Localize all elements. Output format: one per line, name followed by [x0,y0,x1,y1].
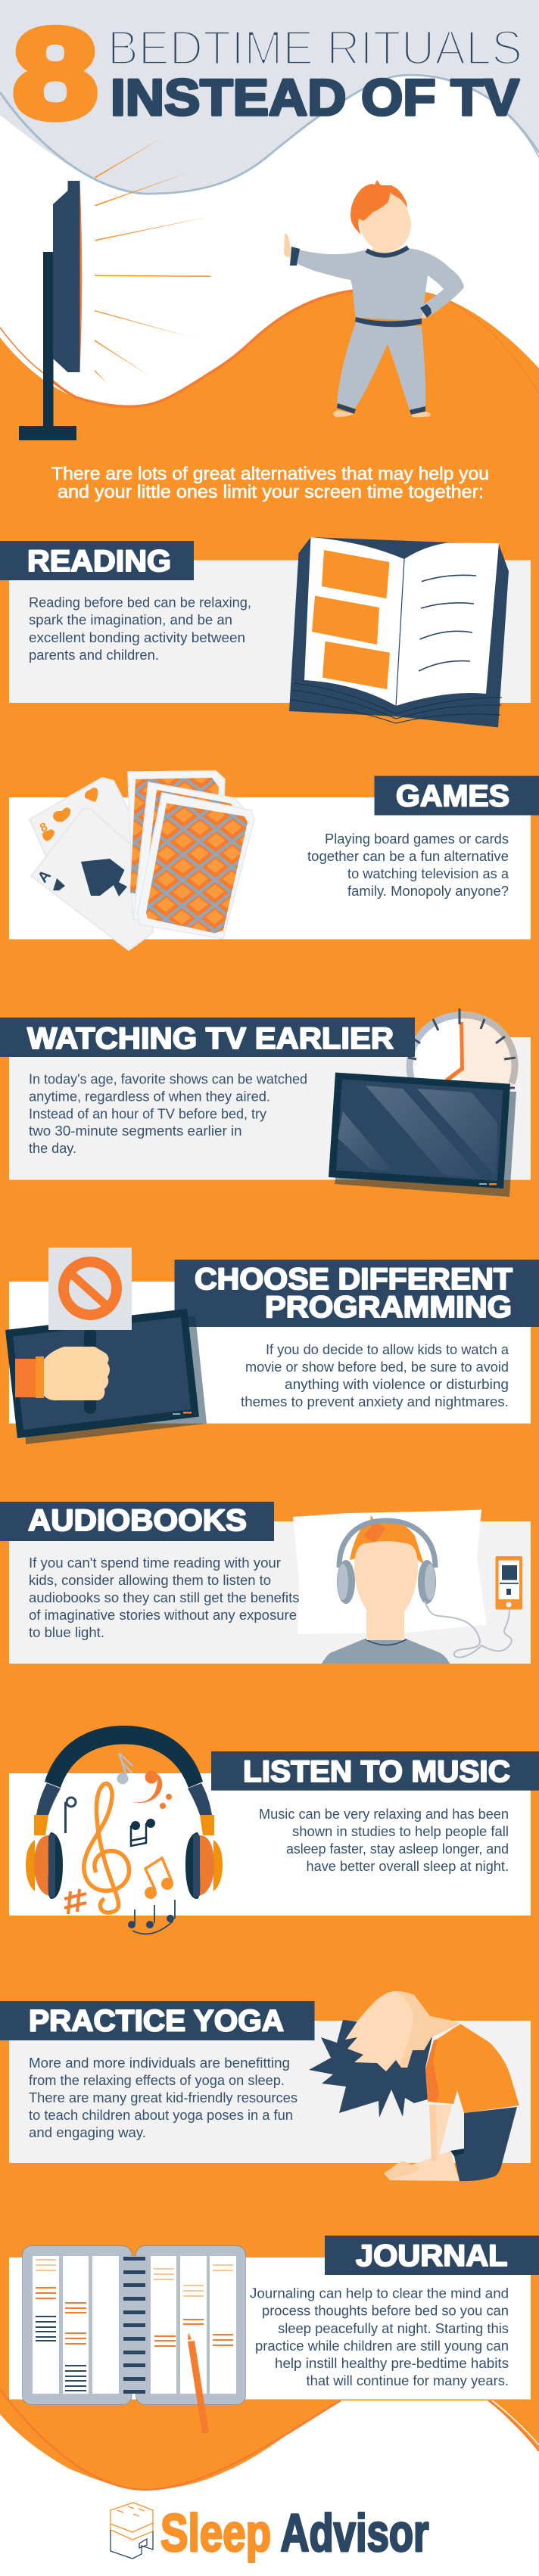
wordmark: Sleep [160,2503,271,2562]
icon: flat screen tv [329,1073,516,1197]
icon: headphones with music notes [26,1726,223,1934]
text: journal [250,2286,509,2388]
heading: watching tv earlier: WATCHING TV EARLIER [27,1022,394,1055]
panel: games [9,771,539,950]
text: practice yoga: from the relaxing effects of yoga on sleep. [29,2073,285,2088]
text: practice yoga: and engaging way. [29,2125,146,2140]
heading: games: GAMES [396,779,509,813]
title line one: BEDTIME RITUALS [107,20,522,75]
title line two: INSTEAD OF TV [111,69,519,126]
heading: listen to music: LISTEN TO MUSIC [243,1755,510,1788]
panel: listen to music [9,1726,539,1934]
text: watching tv earlier [29,1072,307,1156]
text: journal: that will continue for many years. [306,2373,509,2388]
panel: practice yoga [0,1991,531,2181]
text: watching tv earlier: the day. [29,1141,76,1156]
text: reading: Reading before bed can be relaxing, [29,595,251,610]
text: games: together can be a fun alternative [307,849,509,864]
wordmark: Advisor [280,2503,428,2562]
text: choose different programming: themes to prevent anxiety and nightmares. [241,1394,509,1409]
icon: playing cards: A [35,867,55,886]
text: listen to music: Music can be very relaxing and has been [259,1807,509,1822]
heading: choose different programming: CHOOSE DIFFERENT [195,1263,513,1296]
panel: choose different programming [5,1248,539,1444]
panel: reading [0,537,531,728]
text: audiobooks [29,1555,299,1640]
icon: playing cards [30,771,254,950]
intro text [51,464,489,502]
text: choose different programming: If you do decide to allow kids to watch a [266,1342,509,1357]
text: journal: Journaling can help to clear the mind and [250,2286,509,2301]
text: listen to music [259,1807,509,1874]
panel: watching tv earlier [0,1008,531,1197]
icon: open journal with pencil [23,2246,245,2433]
text: reading: excellent bonding activity between [29,630,245,645]
text: listen to music: asleep faster, stay asleep longer, and [286,1841,509,1857]
wordmark [160,2503,428,2562]
big numeral eight: 8 [13,2,98,144]
text: journal: sleep peacefully at night. Starting this [278,2321,509,2336]
heading: audiobooks: AUDIOBOOKS [28,1504,247,1537]
text: games: to watching television as a [347,866,509,881]
text: journal: process thoughts before bed so you can [262,2304,509,2319]
icon: mattress stack [111,2503,153,2559]
text: audiobooks: If you can't spend time reading with your [29,1555,281,1571]
icon: tv with no sign held by a fist [5,1248,207,1444]
intro text: There are lots of great alternatives that may help you [51,464,489,484]
text: journal: practice while children are still young can [255,2338,509,2354]
text: audiobooks: audiobooks so they can still get the benefits [29,1590,299,1605]
text: games: family. Monopoly anyone? [347,884,509,899]
text: audiobooks: of imaginative stories without any exposure [29,1608,297,1623]
illustration: child in pajamas holding up a hand [284,180,464,417]
text: audiobooks: kids, consider allowing them to listen to [29,1573,271,1588]
illustration: child in yoga pose [309,1991,519,2181]
icon: playing cards: 8 [38,821,50,835]
text: watching tv earlier: Instead of an hour of TV before bed, try [29,1106,266,1121]
text: choose different programming: anything with violence or disturbing [285,1377,509,1392]
icon: television side view with rays [19,138,210,440]
text: choose different programming: movie or show before bed, be sure to avoid [245,1359,509,1375]
icon: clock [408,1008,517,1119]
text: listen to music: have better overall sleep at night. [306,1859,509,1874]
text: reading: parents and children. [29,648,159,663]
text: watching tv earlier: anytime, regardless of when they aired. [29,1089,270,1105]
text: audiobooks: to blue light. [29,1625,104,1640]
text: reading: spark the imagination, and be an [29,613,232,628]
heading: choose different programming: PROGRAMMING [265,1291,512,1324]
intro text: and your little ones limit your screen time together: [58,482,484,502]
heading: journal: JOURNAL [356,2239,507,2273]
panel: audiobooks [0,1502,531,1664]
logo: sleep advisor [111,2503,428,2562]
text: practice yoga: More and more individuals are benefitting [29,2056,290,2071]
text: practice yoga: to teach children about yoga poses in a fun [29,2108,293,2123]
title [13,2,522,144]
heading: reading: READING [27,545,171,578]
heading: choose different programming [195,1263,513,1324]
heading: practice yoga: PRACTICE YOGA [29,2005,284,2038]
text: games: Playing board games or cards [325,831,509,847]
icon: open book [289,537,509,728]
text: practice yoga: There are many great kid-friendly resources [29,2090,298,2105]
text: games [307,831,509,899]
text: practice yoga [29,2056,298,2140]
text: watching tv earlier: two 30-minute segments earlier in [29,1123,242,1139]
text: choose different programming [241,1342,509,1409]
text: reading [29,595,251,663]
text: journal: help instill healthy pre-bedtime habits [275,2356,509,2371]
icon: child on pillow wearing headphones [293,1510,522,1664]
text: listen to music: shown in studies to help people fall [292,1824,509,1839]
panel: journal [9,2236,539,2433]
text: watching tv earlier: In today's age, favorite shows can be watched [29,1072,307,1087]
